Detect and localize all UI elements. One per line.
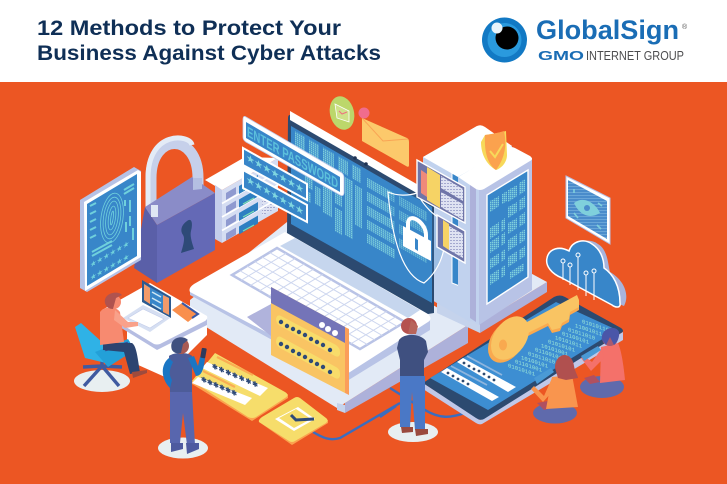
GlobalSign logo: GlobalSign bbox=[536, 15, 679, 45]
desk bbox=[102, 280, 207, 377]
seated man on chair bbox=[74, 293, 147, 392]
header band bbox=[0, 0, 727, 82]
binary rows on tablet: 01010101 bbox=[548, 338, 576, 354]
login bars on tablet bbox=[457, 358, 516, 392]
tablet with key bbox=[423, 296, 623, 424]
binary rows on tablet: 01010101 bbox=[508, 362, 536, 378]
keyhole bbox=[181, 220, 194, 253]
laptop platform bbox=[190, 222, 468, 413]
GlobalSign logo bbox=[482, 15, 688, 63]
GlobalSign logo: ® bbox=[682, 23, 688, 31]
binary rows on tablet: 10101011 bbox=[555, 334, 583, 350]
rack unit dividers bbox=[222, 172, 278, 230]
cloud bbox=[547, 241, 626, 307]
eye scan panel bbox=[566, 176, 610, 244]
binary rows on tablet: 01100101 bbox=[562, 330, 590, 346]
seated man bbox=[580, 328, 625, 398]
golden key bbox=[480, 295, 579, 370]
note pad bbox=[172, 303, 198, 322]
cable right bbox=[380, 388, 465, 417]
cloud circuit nodes bbox=[563, 256, 594, 300]
cable left bbox=[313, 403, 400, 439]
small laptop screen bbox=[142, 280, 171, 318]
binary rows on tablet: 01010110 bbox=[582, 318, 610, 334]
server rack stack bbox=[205, 157, 278, 243]
standing man with phone bbox=[158, 337, 208, 458]
password pill two bbox=[276, 336, 340, 379]
server platform bbox=[437, 262, 547, 333]
password window bbox=[271, 287, 349, 395]
screen hinge shadow bbox=[280, 238, 420, 318]
GlobalSign logo: INTERNET GROUP bbox=[586, 49, 684, 63]
fingerprint tablet: ★★★★★★ bbox=[90, 252, 129, 283]
binary rows on tablet: 01100101 bbox=[535, 346, 563, 362]
GlobalSign logo: GMO bbox=[538, 48, 584, 63]
login tray: ✱✱✱✱✱✱ bbox=[201, 374, 237, 398]
fingerprint tablet bbox=[80, 167, 141, 292]
camera dots bbox=[353, 156, 357, 160]
binary rows on tablet bbox=[508, 318, 610, 378]
front tower bbox=[458, 177, 479, 325]
password pill one bbox=[276, 315, 340, 357]
password stars field two: ★★★★★★★ bbox=[246, 174, 304, 219]
seated woman bbox=[531, 355, 578, 424]
binary rows on tablet: 11001011 bbox=[575, 322, 603, 338]
padlock bbox=[134, 138, 215, 283]
tower panel bbox=[487, 170, 528, 304]
server towers bbox=[423, 125, 532, 325]
laptop white deck bbox=[190, 232, 430, 381]
check badge bubble bbox=[326, 94, 358, 132]
back tower bbox=[423, 126, 512, 322]
binary rows on tablet: 01011010 bbox=[568, 326, 596, 342]
laptop screen bbox=[287, 111, 434, 314]
small laptop base bbox=[123, 305, 170, 332]
shield with lock bbox=[388, 192, 446, 283]
fingerprint tablet: ★★★★★★ bbox=[90, 239, 129, 270]
enter password field bbox=[243, 116, 344, 196]
password stars field one: ★★★★★★★ bbox=[246, 152, 304, 197]
title: 12 Methods to Protect Your bbox=[37, 17, 341, 40]
binary rows on tablet: 01011010 bbox=[528, 350, 556, 366]
standing man at tablet bbox=[388, 318, 438, 442]
screen code bbox=[295, 131, 427, 284]
login tray bbox=[192, 353, 288, 421]
binary rows on tablet: 10101001 bbox=[541, 342, 569, 358]
binary rows on tablet: 10100101 bbox=[521, 354, 549, 370]
rack unit panels bbox=[239, 175, 258, 234]
title bbox=[37, 17, 381, 65]
touchpad bbox=[247, 304, 271, 336]
envelope bbox=[358, 108, 409, 167]
enter password field: ENTER PASSWORD bbox=[247, 124, 338, 192]
yellow security shield bbox=[481, 131, 507, 170]
title: Business Against Cyber Attacks bbox=[37, 42, 381, 65]
keyboard bbox=[232, 248, 405, 349]
login tray: ✱✱✱✱✱✱✱ bbox=[212, 361, 258, 390]
server readout panels bbox=[417, 160, 465, 263]
check tile bbox=[259, 397, 328, 445]
fingerprint bbox=[98, 192, 126, 244]
binary rows on tablet: 01101001 bbox=[515, 358, 543, 374]
